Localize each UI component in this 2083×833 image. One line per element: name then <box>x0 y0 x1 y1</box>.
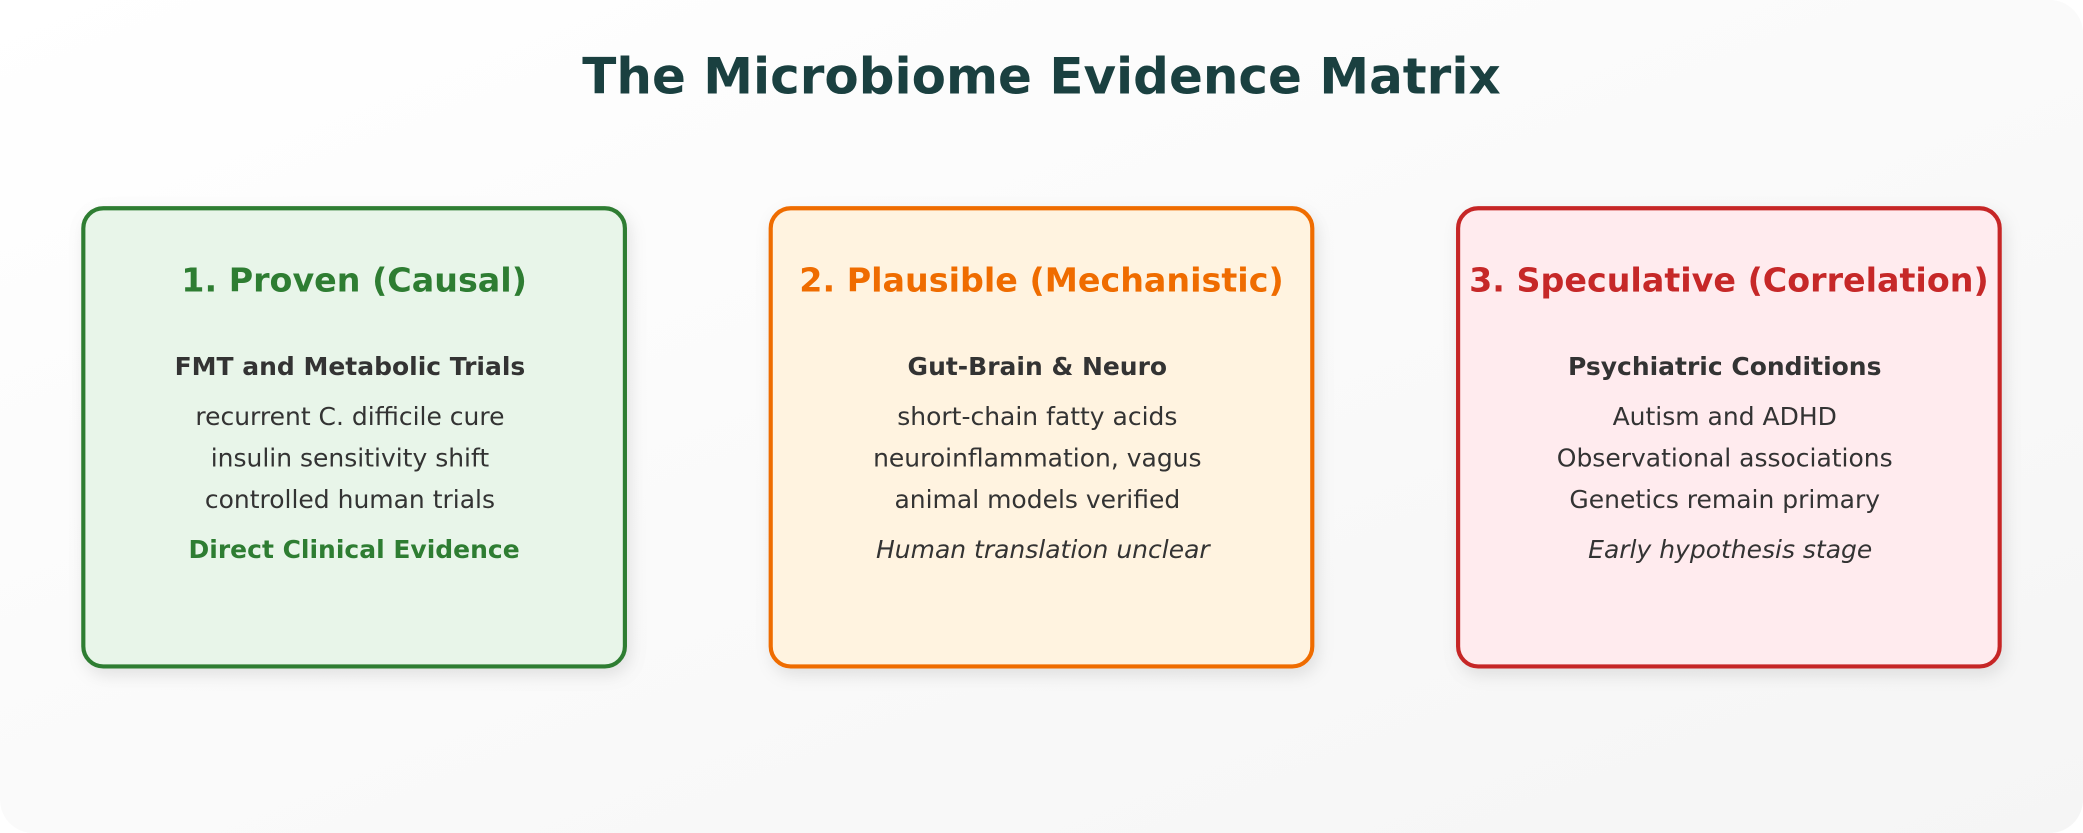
card 2 verdict: Human translation unclear <box>876 535 1211 564</box>
card 3 evidence list: Genetics remain primary <box>1569 485 1880 514</box>
card 3 evidence list <box>1557 402 1893 514</box>
card 2 evidence list: neuroinflammation, vagus <box>873 443 1202 472</box>
card 3 verdict: Early hypothesis stage <box>1588 535 1872 564</box>
panel: speculative (correlation) <box>1458 208 2000 666</box>
card 1 evidence list: recurrent C. difficile cure <box>195 402 504 431</box>
card 3 subheading: Psychiatric Conditions <box>1568 352 1881 381</box>
card 1 evidence list: controlled human trials <box>205 485 495 514</box>
card 2 evidence list: short-chain fatty acids <box>897 402 1177 431</box>
card 3 box <box>1458 208 2000 666</box>
card 2 evidence list: animal models verified <box>894 485 1180 514</box>
card 1 evidence list: insulin sensitivity shift <box>211 443 489 472</box>
card 1 subheading: FMT and Metabolic Trials <box>175 352 525 381</box>
panel: proven (causal) <box>83 208 625 666</box>
card 3 evidence list: Observational associations <box>1557 443 1893 472</box>
card 2 heading: 2. Plausible (Mechanistic) <box>799 261 1284 300</box>
card 1 box <box>83 208 625 666</box>
title: The Microbiome Evidence Matrix <box>582 47 1501 105</box>
card 1 verdict: Direct Clinical Evidence <box>189 535 520 564</box>
card 1 heading: 1. Proven (Causal) <box>181 261 527 300</box>
card 2 box <box>771 208 1312 666</box>
card 2 evidence list <box>873 402 1202 514</box>
card 2 subheading: Gut-Brain & Neuro <box>908 352 1167 381</box>
card 1 evidence list <box>195 402 504 514</box>
card 3 heading: 3. Speculative (Correlation) <box>1469 261 1989 300</box>
card 3 evidence list: Autism and ADHD <box>1613 402 1837 431</box>
panel: plausible (mechanistic) <box>771 208 1312 666</box>
